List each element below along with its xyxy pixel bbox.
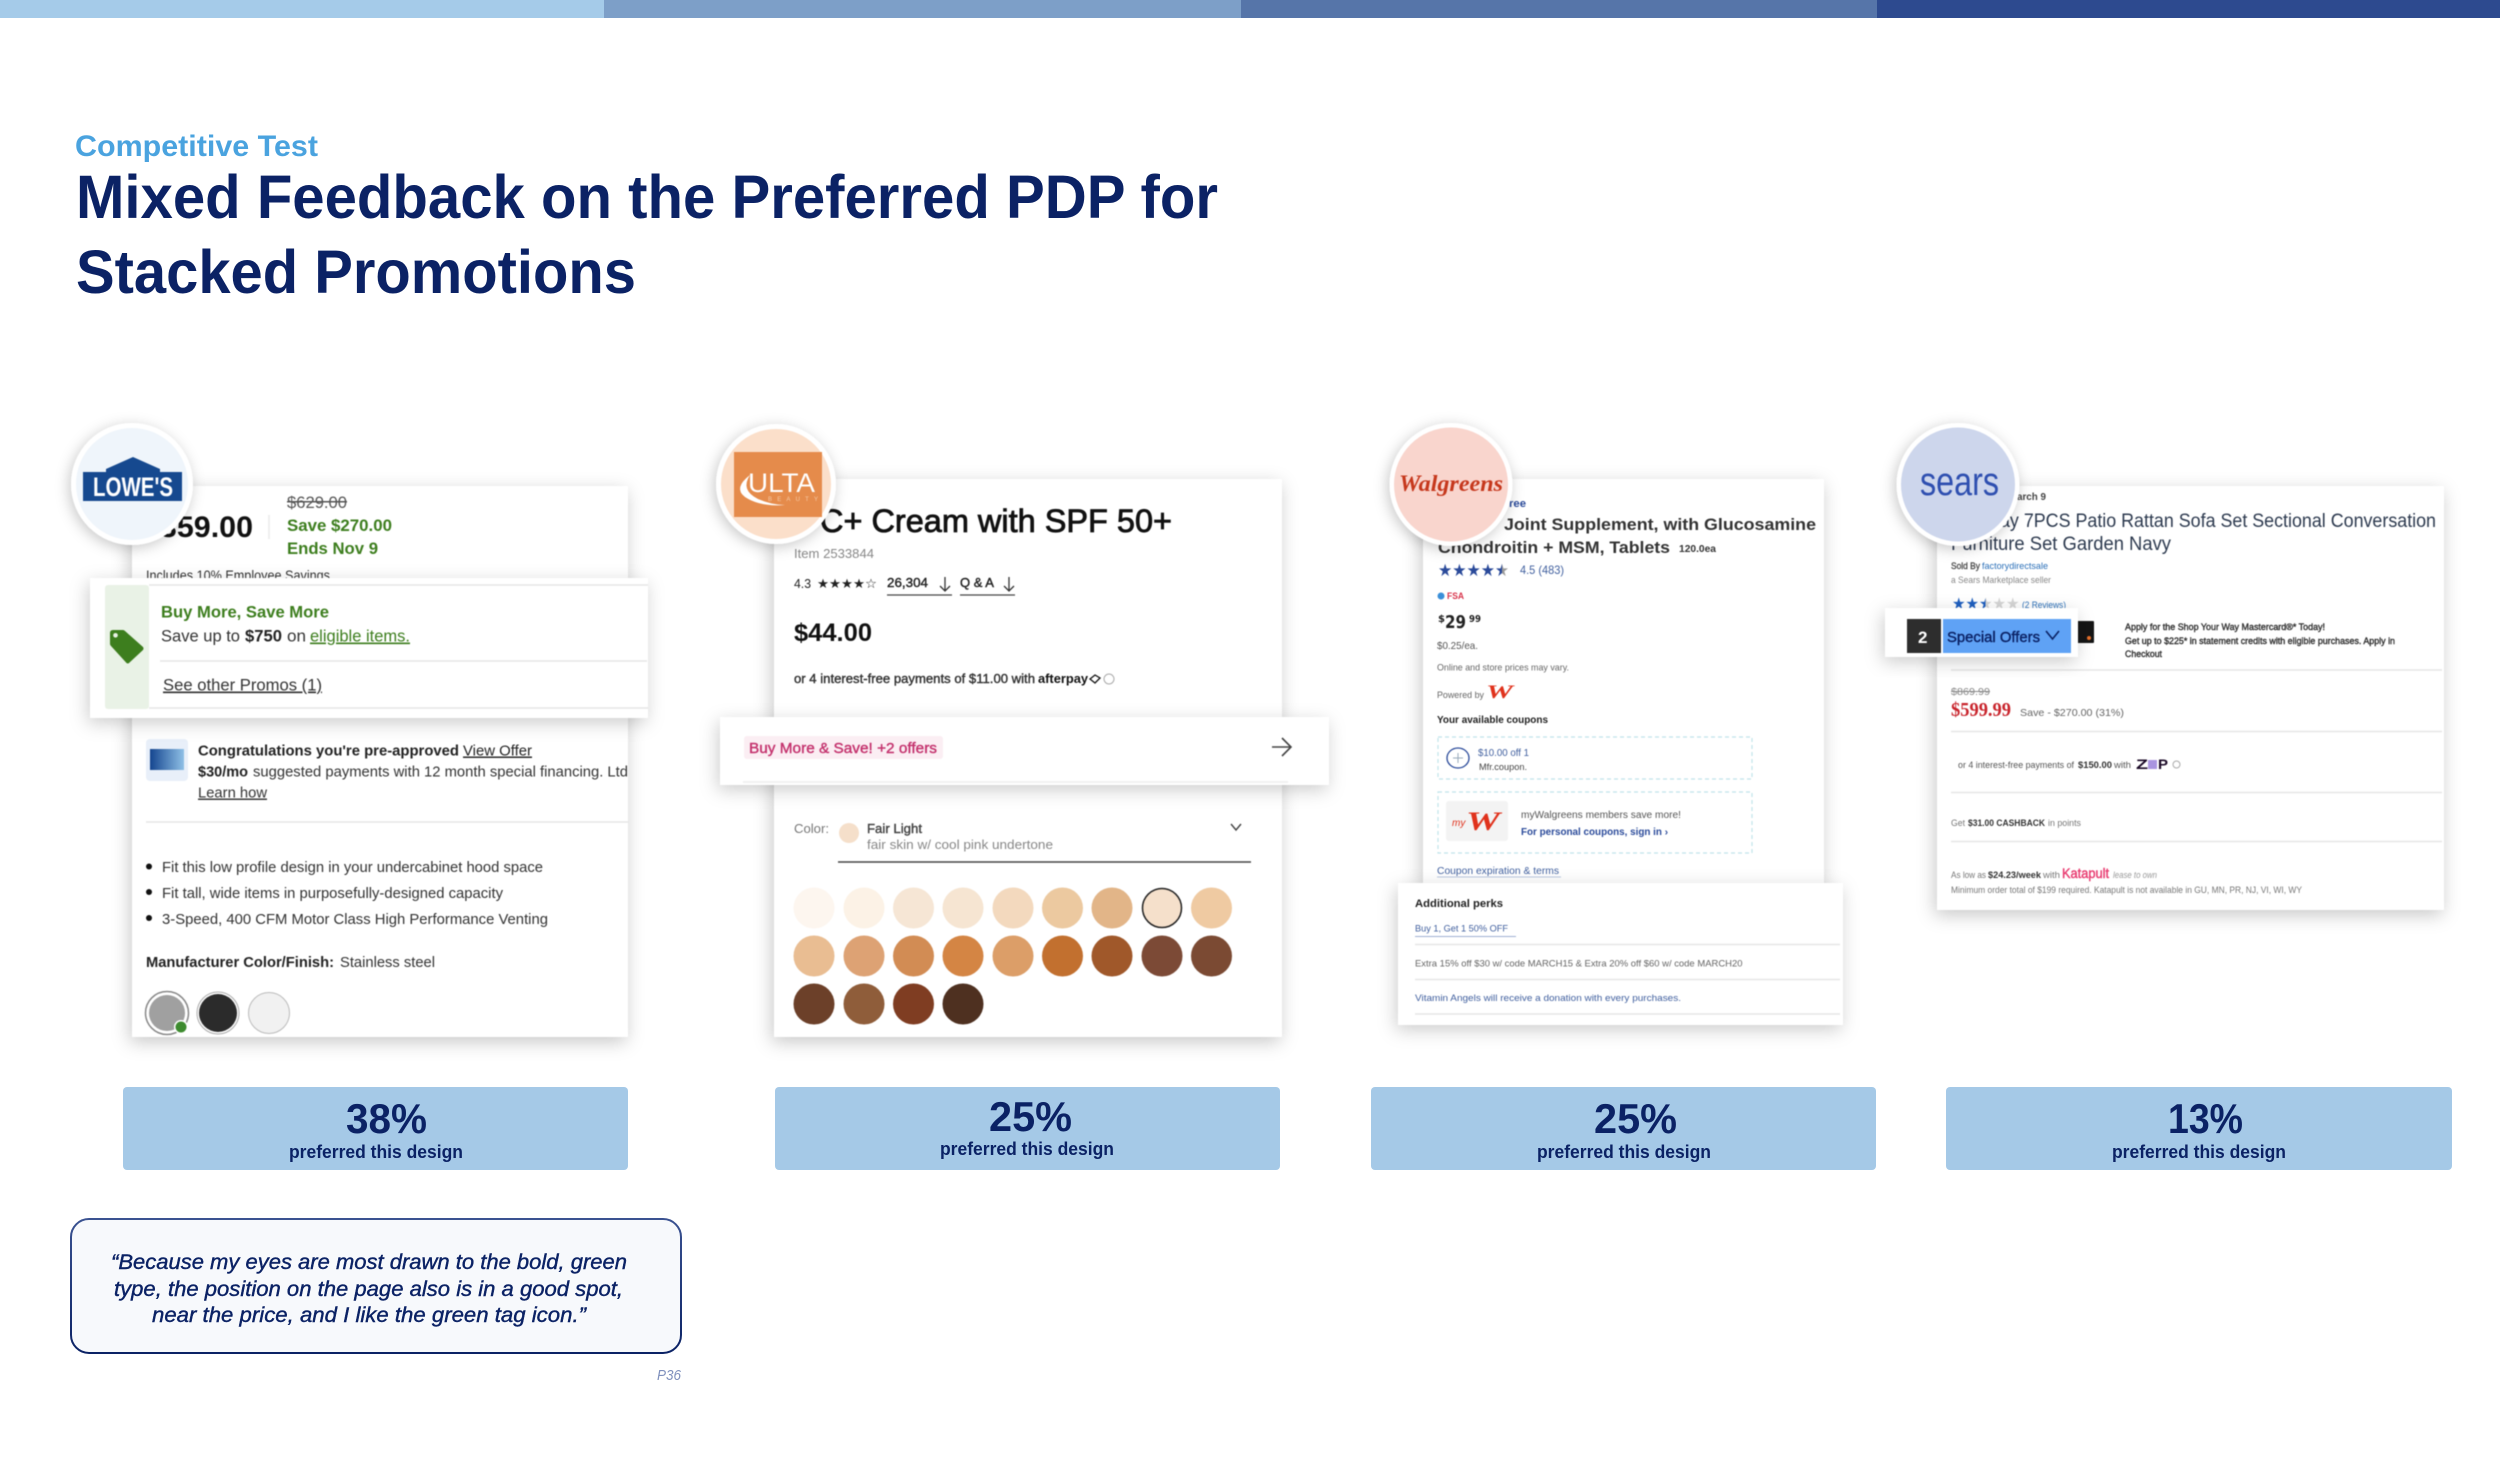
lowes financing offer: Congratulations you're pre-approved [198,744,459,760]
icon: green tag [110,630,144,664]
sears card background [1937,486,2444,910]
sears special offers callout: Special Offers [1947,629,2040,646]
stat: Ulta 25%: preferred this design [940,1139,1114,1159]
walgreens coupons: $10.00 off 1 [1478,748,1529,759]
lowes colour swatches [146,992,290,1034]
walgreens price block: 29 [1445,612,1466,633]
walgreens price block: FSA [1447,591,1464,601]
stat: Sears 13%: 13% [2168,1095,2243,1142]
lowes promo callout: Save up to [161,628,240,646]
lowes colour finish label [146,955,435,971]
lowes financing offer: Learn how [198,786,268,802]
quote callout: type, the position on the page also is in a good spot, [114,1278,623,1301]
icon: Sears logo badge [1896,423,2020,546]
walgreens price block: Powered by [1437,690,1484,701]
sears cashback [1951,818,2081,828]
quote callout: “Because my eyes are most drawn to the bold, green [111,1251,627,1274]
sears seller and rating: a Sears Marketplace seller [1951,575,2051,586]
sears zip payments: with [2113,760,2131,770]
ulta item details: Q & A [960,575,994,590]
sears katapult lease: lease to own [2113,870,2157,880]
ulta item details: Item 2533844 [794,546,874,561]
icon: Walgreens logo badge [1390,423,1512,546]
lowes feature bullets: Fit tall, wide items in purposefully-designed capacity [162,886,504,902]
icon: Ulta logo badge: BEAUTY [768,497,818,503]
lowes price block: $359.00 [143,511,253,544]
sears product heading: Furniture Set Garden Navy [1951,534,2171,555]
ulta colour selector: Color: [794,821,829,836]
walgreens product heading: 120.0ea [1679,544,1716,555]
lowes price block: Ends Nov 9 [287,539,378,558]
stat: Ulta 25% [775,1087,1280,1170]
sears zip payments: P [2158,756,2168,772]
walgreens perks callout: Extra 15% off $30 w/ code MARCH15 & Extra 20% off $60 w/ code MARCH20 [1415,958,1742,970]
stat: Walgreens 25%: 25% [1594,1095,1677,1142]
ulta card background [774,479,1282,1037]
walgreens rating [1438,561,1564,581]
sears credit card offer [2077,621,2395,660]
lowes promo callout: on [287,628,306,646]
sears price block [1951,686,2124,721]
walgreens price block: $ [1438,614,1445,625]
panel: Ulta product page [716,424,1329,1037]
sears katapult lease: Katapult [2062,865,2109,881]
stat: Ulta 25%: 25% [989,1093,1072,1140]
lowes promo callout: eligible items. [310,628,410,646]
walgreens rating: 4.5 (483) [1520,563,1564,577]
ulta promo callout [720,717,1329,785]
sears katapult lease: $24.23/week [1988,870,2042,880]
walgreens price block [1437,591,1569,703]
walgreens price block: $0.25/ea. [1437,640,1478,652]
walgreens coupons: my [1452,818,1466,829]
icon: Lowe's logo badge [71,423,193,545]
sears product heading [1951,492,2436,555]
ulta afterpay line: afterpay [1038,671,1089,686]
sears katapult lease: with [2042,870,2060,880]
ulta colour selector: Fair Light [867,821,922,836]
sears zip payments: or 4 interest-free payments of [1958,760,2074,770]
lowes feature bullets [146,860,548,928]
top colour bar [0,0,2500,18]
walgreens perks callout: Additional perks [1415,898,1503,910]
sears zip payments: Z [2136,756,2149,772]
lowes colour finish label: Manufacturer Color/Finish: [146,955,334,971]
sears zip payments [1958,756,2180,772]
title: Stacked Promotions [76,238,636,306]
sears cashback: $31.00 CASHBACK [1968,818,2045,828]
walgreens product heading [1438,498,1816,557]
stat: Sears 13%: preferred this design [2112,1142,2286,1162]
lowes price block: $629.00 [287,493,347,512]
stat: Lowe's 38% [123,1087,628,1170]
lowes price block: Includes 10% Employee Savings [146,567,330,583]
lowes financing offer: $30/mo [198,764,248,780]
sears price block: $599.99 [1951,699,2011,721]
sears credit card offer: Get up to $225* in statement credits with eligible purchases. Apply in [2125,636,2395,647]
walgreens coupons: Coupon expiration & terms [1437,866,1559,877]
walgreens product heading: Chondroitin + MSM, Tablets [1438,538,1670,557]
sears seller and rating [1951,561,2066,613]
sears cashback: Get [1951,818,1965,828]
quote callout: near the price, and I like the green tag icon.” [152,1304,587,1327]
walgreens price block: 99 [1469,614,1481,625]
sears price block: $869.99 [1951,686,1990,698]
panel: Lowe's product page [71,423,648,1037]
ulta item details: 4.3 [794,576,811,591]
sears zip payments: $150.00 [2078,760,2112,770]
walgreens card background [1423,479,1824,889]
lowes financing offer [146,739,628,802]
ulta shade swatches [794,888,1232,1024]
icon: Lowe's logo badge: LOWE'S [93,472,173,502]
quote callout [71,1219,681,1353]
walgreens coupons: For personal coupons, sign in › [1521,827,1668,838]
sears seller and rating: (2 Reviews) [2022,600,2066,611]
sears seller and rating: ★★ [1992,594,2020,613]
walgreens coupons: myWalgreens members save more! [1521,810,1681,821]
lowes price block [143,493,392,583]
sears product heading: ay 7PCS Patio Rattan Sofa Set Sectional Conversation [2000,511,2436,532]
title [76,163,1218,306]
walgreens product heading: ree [1509,498,1526,510]
ulta price: $44.00 [794,619,872,647]
ulta product heading: C+ Cream with SPF 50+ [820,503,1172,539]
walgreens perks callout [1398,883,1843,1025]
sears seller and rating: ★★ [1952,594,1979,613]
stat: Lowe's 38%: 38% [346,1095,427,1142]
lowes promo callout: See other Promos (1) [163,676,322,694]
walgreens product heading: Joint Supplement, with Glucosamine [1504,515,1816,534]
stat: Lowe's 38%: preferred this design [289,1142,463,1162]
icon: Ulta logo badge [716,424,836,544]
ulta item details [794,546,1015,595]
ulta item details: ★★★★☆ [817,577,877,592]
ulta afterpay line: or 4 interest-free payments of $11.00 with [794,671,1035,686]
icon: arrow right [1272,738,1291,756]
walgreens perks callout: Buy 1, Get 1 50% OFF [1415,924,1508,934]
sears katapult lease: Minimum order total of $199 required. Katapult is not available in GU, MN, PR, NJ, VI, WI, WY [1951,885,2302,895]
walgreens rating: ★ [1495,561,1509,581]
icon: Sears logo badge: sears [1920,460,1999,504]
title: Mixed Feedback on the Preferred PDP for [76,163,1218,231]
lowes card background [132,486,628,1037]
lowes price block: Save $270.00 [287,516,392,535]
ulta colour selector: fair skin w/ cool pink undertone [867,837,1053,852]
stat: Walgreens 25%: preferred this design [1537,1142,1711,1162]
stat: Walgreens 25% [1371,1087,1876,1170]
sears cashback: in points [2048,818,2081,828]
eyebrow: Competitive Test: Competitive Test [75,130,318,163]
lowes colour finish label: Stainless steel [340,955,435,971]
icon: Ulta logo badge: ULTA [748,468,815,498]
walgreens coupons: Your available coupons [1437,715,1548,726]
lowes promo callout [90,578,648,718]
ulta item details: 26,304 [887,575,928,590]
sears seller and rating: Sold By [1951,561,1980,572]
walgreens coupons: W [1466,807,1503,836]
walgreens price block: W [1486,682,1515,703]
walgreens perks callout: Vitamin Angels will receive a donation with every purchases. [1415,993,1681,1004]
sears seller and rating: factorydirectsale [1982,561,2048,572]
icon: Walgreens logo badge: Walgreens [1399,471,1503,496]
walgreens coupons: Mfr.coupon. [1479,762,1527,772]
ulta promo callout: Buy More & Save! +2 offers [749,740,937,757]
ulta colour selector [794,821,1251,862]
walgreens price block: Online and store prices may vary. [1437,662,1569,674]
sears special offers callout: 2 [1918,628,1927,647]
sears katapult lease [1951,865,2302,895]
lowes feature bullets: Fit this low profile design in your undercabinet hood space [162,860,543,876]
stat: Sears 13% [1946,1087,2452,1170]
lowes financing offer: suggested payments with 12 month special financing. Ltd [253,764,628,780]
sears product heading: arch 9 [2017,492,2046,503]
sears katapult lease: As low as [1951,870,1986,880]
panel: Walgreens product page [1390,423,1843,1025]
sears seller and rating: ★ [1979,594,1992,613]
walgreens coupons [1437,715,1752,877]
walgreens rating: ★★★★ [1438,561,1495,581]
sears credit card offer: Apply for the Shop Your Way Mastercard®* Today! [2125,622,2325,633]
sears special offers callout [1885,608,2078,657]
lowes promo callout: $750 [245,628,282,646]
lowes financing offer: View Offer [463,744,532,760]
panel: Sears product page [1885,423,2444,910]
lowes promo callout: Buy More, Save More [161,604,329,622]
sears credit card offer: Checkout [2125,649,2162,660]
participant reference P36: P36 [657,1367,682,1384]
lowes feature bullets: 3-Speed, 400 CFM Motor Class High Performance Venting [162,912,548,928]
sears price block: Save - $270.00 (31%) [2020,707,2124,719]
